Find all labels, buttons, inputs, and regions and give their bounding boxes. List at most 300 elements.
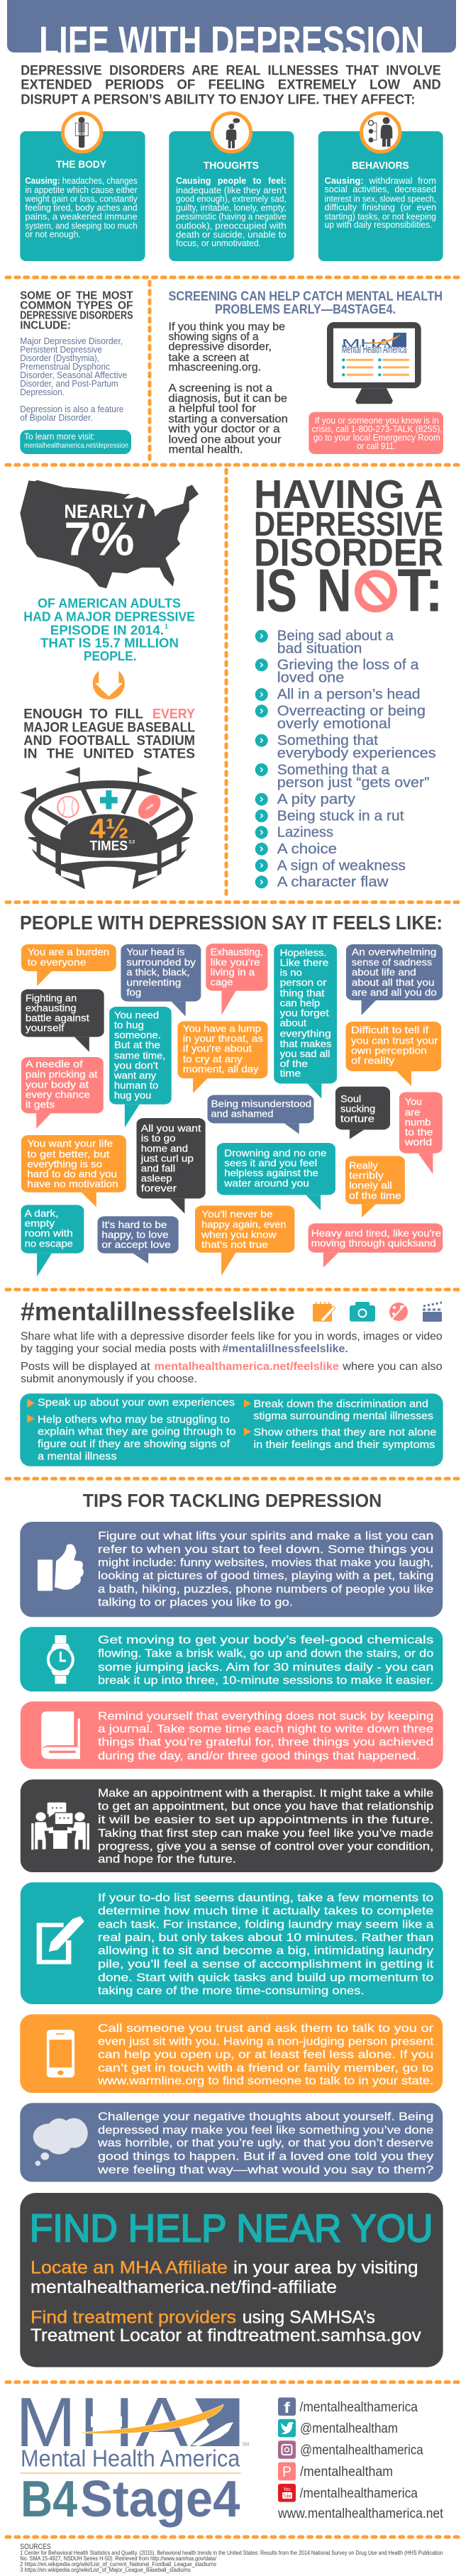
- callout: crisis line: crisis, call 1-800-273-TALK (8255),: [312, 424, 443, 434]
- heading: common types: DEPRESSIVE DISORDERS: [20, 309, 133, 321]
- icon: phone: [47, 2030, 74, 2077]
- panel: tip to-do list: [21, 1882, 443, 2004]
- list item: sad: Being sad about a: [277, 628, 394, 643]
- bubble: torture: torture: [340, 1114, 374, 1124]
- bubble: never be happy: [195, 1205, 294, 1276]
- panel: behaviors: social activities, decreased: [325, 184, 436, 194]
- bubble: hug: you don't: [114, 1061, 159, 1071]
- panel: tip to-do list: each task. For instance, folding laundry may seem like a: [98, 1918, 433, 1930]
- bubble: trust perception: you can trust your: [351, 1036, 438, 1046]
- bubble: hard to be happy: It's hard to be: [101, 1220, 167, 1231]
- social: instagram: [278, 2440, 423, 2459]
- panel: tip therapist: to get an appointment, but once you have that relationship: [98, 1801, 433, 1813]
- icon: film clapper: [423, 1303, 442, 1322]
- bubble: fall asleep forever: forever: [141, 1183, 177, 1194]
- bubble: hug: hug you: [114, 1090, 151, 1101]
- bubble: lonely: [345, 1156, 405, 1217]
- panel: find help near you: [20, 2193, 443, 2367]
- bubble: fighting battle: Fighting an: [26, 993, 77, 1004]
- panel: screening: [167, 288, 443, 455]
- bullet: show others: [244, 1427, 436, 1451]
- bullet: break down discrimination: stigma surrounding mental illnesses: [254, 1410, 433, 1422]
- bubble: hopeless: thing that: [280, 988, 325, 999]
- heading: common types: INCLUDE:: [20, 319, 71, 331]
- bubble: quicksand: moving through quicksand: [311, 1239, 436, 1249]
- bubble: hopeless: you sad all: [280, 1049, 330, 1060]
- heading: common types: [20, 289, 133, 331]
- bubble: lump: You have a lump: [183, 1024, 261, 1034]
- bubble: fog: surrounded by: [126, 958, 196, 968]
- panel: tip get moving: some jumping jacks. Aim for 30 minutes daily - you can: [98, 1662, 433, 1674]
- panel: tip journal: [21, 1701, 443, 1769]
- panel: tip call someone: www.warmline.org to find someone to talk to in your state.: [97, 2075, 433, 2087]
- list item: choice: A choice: [277, 841, 337, 857]
- screening text: depressive disorder,: [169, 341, 272, 353]
- bubble: burden: You are a burden: [28, 947, 109, 958]
- bubble: hard to be happy: [98, 1216, 179, 1264]
- panel: tip challenge thoughts: depressed may make you feel like something you’ve done: [98, 2124, 433, 2136]
- panel: the body: THE BODY: [56, 159, 106, 171]
- panel: thoughts: good enough), extremely sad,: [176, 194, 287, 204]
- icon: x-ray body: [62, 114, 101, 152]
- bubble: hopeless: Like there: [280, 958, 329, 968]
- bubble: misunderstood: [208, 1095, 314, 1134]
- intro statement: EXTENDED PERIODS OF FEELING EXTREMELY LOW AND: [21, 77, 441, 93]
- screening text: loved one about your: [169, 433, 282, 446]
- bubble: fog: [121, 944, 201, 1017]
- list item: grieving: loved one: [277, 670, 344, 686]
- panel: tip get moving: break it up into three, 10-minute sessions to make it easier.: [98, 1674, 433, 1686]
- list item: weakness: A sign of weakness: [277, 858, 406, 873]
- callout: crisis line: [309, 412, 443, 454]
- bubble: drowning: Drowning and no one: [224, 1149, 327, 1159]
- screening text: take a screen at: [169, 352, 250, 364]
- chart: US map nearly 7 percent: [20, 480, 199, 588]
- social: twitter: [278, 2419, 398, 2437]
- list item: sad: bad situation: [277, 641, 362, 656]
- list item: choice: [255, 841, 337, 857]
- intro statement: DISRUPT A PERSON’S ABILITY TO ENJOY LIFE. THEY AFFECT:: [21, 92, 415, 108]
- panel: thoughts: THOUGHTS: [204, 160, 259, 172]
- title banner: [7, 0, 456, 65]
- statistic text: EPISODE IN 2014.: [50, 622, 164, 637]
- screening text: mental health.: [169, 443, 243, 455]
- disorder list text: Disorder (Dysthymia),: [20, 353, 99, 363]
- social: pinterest: [278, 2462, 393, 2480]
- panel: tip to-do list: real pain, but only takes about 10 minutes. Rather than: [98, 1932, 433, 1944]
- social: youtube: You: [284, 2487, 291, 2492]
- bubble: misunderstood: and ashamed: [211, 1109, 273, 1120]
- panel: tip call someone: Call someone you trust and ask them to talk to you or: [98, 2023, 434, 2035]
- icon: thumbs up: [38, 1544, 84, 1591]
- bubble: no motivation: You want your life: [27, 1139, 113, 1149]
- bubble: no motivation: to get better, but: [27, 1149, 110, 1160]
- icon: pencil and checkbox: [39, 1916, 84, 1962]
- panel: the body: [20, 114, 145, 261]
- panel: tip call someone: [20, 2014, 443, 2093]
- icon: thought cloud: [33, 2118, 88, 2166]
- website: www.mentalhealthamerica.net: [277, 2506, 444, 2521]
- sources: SOURCES: [20, 2543, 51, 2551]
- panel: thoughts: guilty, irritable, lonely, empty,: [176, 203, 287, 213]
- bubble: no motivation: have no motivation: [27, 1179, 118, 1190]
- disorder list text: of Bipolar Disorder.: [20, 413, 93, 423]
- bubble: drowning: helpless against the: [224, 1168, 318, 1179]
- panel: find help near you: using SAMHSA’s: [243, 2307, 375, 2327]
- chart: US map nearly 7 percent: NEARLY: [64, 501, 134, 522]
- list: what depression is not: [255, 628, 436, 890]
- icon: down arrow: [93, 665, 125, 700]
- heading: hashtag: #mentalillnessfeelslike: [21, 1297, 295, 1326]
- bubble: needle: it gets: [26, 1100, 55, 1110]
- panel: thoughts: Causing people to feel:: [176, 176, 287, 186]
- bubble: never be happy: You'll never be: [201, 1210, 273, 1220]
- icon: computer monitor with MHA logo: [327, 322, 421, 404]
- panel: thoughts: death or suicide, unable to: [176, 230, 287, 240]
- screening text: [167, 321, 288, 455]
- text block: share your experience: Share what life with a depressive disorder feels like for you in words, images or video: [21, 1330, 443, 1342]
- logo: Mental Health America B4Stage4: Mental Health America: [21, 2445, 240, 2472]
- panel: behaviors: interest in sex, slowed speech,: [325, 194, 436, 204]
- stadium comparison text: ENOUGH TO FILL: [23, 707, 143, 722]
- bubble: fall asleep forever: asleep: [141, 1173, 172, 1184]
- panel: find help near you: Treatment Locator at findtreatment.samhsa.gov: [30, 2326, 421, 2345]
- logo: Mental Health America B4Stage4: H: [79, 2383, 134, 2461]
- bubble: dark room: no escape: [25, 1239, 73, 1249]
- learn more button: To learn more visit:: [24, 431, 95, 441]
- disorder list text: Premenstrual Dysphoric: [20, 362, 110, 372]
- panel: tip get moving: flowing. Take a brisk walk, go up and down the stairs, or do: [98, 1648, 433, 1660]
- bubble: dark room: empty: [25, 1219, 55, 1229]
- panel: common types of depressive disorders: [20, 289, 133, 454]
- text block: share your experience: by tagging your social media posts with: [21, 1343, 220, 1355]
- stadium comparison text: AND FOOTBALL STADIUM: [23, 733, 195, 748]
- panel: behaviors: starting) tasks, or not keeping: [325, 211, 436, 221]
- icon: person with behaviors: [362, 114, 400, 152]
- list item: overreacting: overly emotional: [277, 717, 391, 732]
- panel: hashtag benefits: [20, 1393, 443, 1466]
- panel: tip call someone: can help you open up, or at least feel less alone. If you: [98, 2049, 433, 2061]
- bubble: cage: cage: [211, 978, 233, 988]
- panel: the body: or not enough.: [25, 229, 81, 239]
- bubble: fall asleep forever: is to go: [141, 1134, 176, 1144]
- list item: rut: Being stuck in a rut: [277, 808, 404, 824]
- bubble: needle: pain pricking at: [26, 1070, 98, 1080]
- bubble: fighting battle: exhausting: [26, 1003, 77, 1014]
- sources: [20, 2543, 443, 2573]
- bubble: drowning: water around you: [223, 1178, 309, 1189]
- logo: Mental Health America B4Stage4: M: [16, 2383, 76, 2461]
- disorder list text: Major Depressive Disorder,: [20, 336, 123, 346]
- chart: US map nearly 7 percent: 7%: [64, 513, 135, 566]
- bubble: hug: But at the: [114, 1040, 160, 1051]
- callout: crisis line: or call 911.: [357, 441, 396, 451]
- social: pinterest: /mentalhealtham: [300, 2465, 393, 2480]
- bubble: hug: [109, 1007, 172, 1127]
- bubble: cage: like you're: [211, 958, 260, 968]
- list item: gets over: person just “gets over”: [277, 775, 429, 790]
- bubble: needle: [21, 1057, 104, 1129]
- sources: 2 https://en.wikipedia.org/wiki/List_of_current_National_Football_League_stadiums: [20, 2561, 216, 2567]
- stadium comparison text: MAJOR LEAGUE BASEBALL: [23, 719, 195, 735]
- panel: tip lifts your spirits: might include: funny websites, movies that make you laugh,: [98, 1557, 433, 1569]
- statistic text: THAT IS 15.7 MILLION: [40, 636, 179, 651]
- bubble: trust perception: Difficult to tell if: [351, 1025, 429, 1036]
- panel: the body: Causing: headaches, changes: [25, 176, 138, 186]
- bubble: fall asleep forever: and fall: [141, 1163, 175, 1174]
- panel: tip lifts your spirits: refer to when you start to feel down. Some things you: [98, 1544, 433, 1556]
- bubble: overwhelming sadness: An overwhelming: [352, 947, 436, 958]
- bubble: trust perception: [346, 1022, 441, 1086]
- icon: camera: [350, 1302, 375, 1322]
- bullet: help others: Help others who may be struggling to: [38, 1414, 230, 1426]
- heading: common types: COMMON TYPES OF: [20, 299, 133, 311]
- disorder list text: Persistent Depressive: [20, 345, 102, 355]
- bubble: lump: if you're about: [183, 1044, 252, 1054]
- bubble: lonely: of the time: [349, 1191, 401, 1202]
- panel: tip to-do list: done. Start with quick tasks and build up momentum to: [98, 1972, 433, 1984]
- bubble: hopeless: can help: [280, 998, 320, 1009]
- panel: find help near you: Find treatment providers: [30, 2307, 236, 2327]
- callout: crisis line: go to your local Emergency Room: [313, 433, 440, 443]
- bubble: torture: [335, 1087, 390, 1139]
- statistic text: [23, 596, 195, 663]
- social: youtube: Tube: [283, 2494, 291, 2499]
- bubble: no motivation: everything is so: [27, 1159, 102, 1170]
- heading: having a depressive disorder is not: DISORDER: [254, 531, 443, 575]
- bubble: cage: [206, 944, 268, 1015]
- bubble: cage: Exhausting,: [211, 947, 263, 958]
- bubble: overwhelming sadness: about all that you: [352, 978, 435, 988]
- social: twitter: @mentalhealtham: [300, 2421, 398, 2436]
- panel: tip get moving: [20, 1627, 443, 1691]
- disorder list text: Disorder, Seasonal Affective: [20, 370, 127, 380]
- statistic text: HAD A MAJOR DEPRESSIVE: [23, 609, 195, 624]
- logo: Mental Health America B4Stage4: A: [135, 2383, 189, 2461]
- bubble: never be happy: when you know: [201, 1230, 277, 1241]
- panel: the body: system, and sleeping too much: [25, 221, 138, 231]
- disorder list text: Disorder, and Post-Partum: [20, 379, 118, 389]
- screening text: A screening is not a: [169, 382, 272, 394]
- bubble: hard to be happy: happy, to love: [101, 1230, 169, 1241]
- icon: stadium 4 and a half times: [20, 768, 198, 889]
- bubble: lump: to cry at any: [183, 1054, 243, 1065]
- screening text: mhascreening.org.: [169, 362, 261, 374]
- bullet: help others: [27, 1414, 236, 1463]
- bubble: hug: want any: [113, 1071, 156, 1081]
- text block: share your experience: mentalhealthamerica.net/feelslike: [155, 1361, 339, 1373]
- bubble: hard to be happy: or accept love: [101, 1240, 171, 1251]
- list item: everybody: everybody experiences: [277, 746, 436, 761]
- bubble: torture: Soul: [340, 1094, 361, 1105]
- panel: behaviors: [318, 114, 443, 261]
- bubble: needle: every chance: [26, 1090, 90, 1100]
- social: instagram: @mentalhealthamerica: [300, 2443, 423, 2458]
- bubble: fall asleep forever: just curl up: [140, 1154, 194, 1164]
- list item: grieving: [255, 658, 419, 686]
- list item: pity party: A pity party: [277, 792, 355, 807]
- bubble: never be happy: that's not true: [201, 1240, 268, 1251]
- panel: the body: feeling tired, body aches and: [25, 203, 138, 213]
- bubble: lonely: terribly: [349, 1171, 384, 1181]
- bubble: hug: human to: [114, 1080, 159, 1091]
- panel: tip journal: a journal. Take some time each night to write down three: [98, 1723, 433, 1735]
- bubble: hopeless: person or: [280, 978, 327, 988]
- panel: tip get moving: Get moving to get your body’s feel-good chemicals: [98, 1635, 433, 1647]
- panel: tip challenge thoughts: good things to happen. But if a loved one told you they: [98, 2150, 433, 2162]
- bubble: trust perception: of reality: [351, 1056, 394, 1066]
- disorder list text: [20, 336, 127, 423]
- panel: tip lifts your spirits: a bath, hiking, puzzles, phone numbers of people you like: [98, 1583, 433, 1596]
- bubble: burden: to everyone: [28, 958, 87, 968]
- panel: tip therapist: [21, 1779, 443, 1872]
- bubble: lump: [177, 1021, 268, 1093]
- bubble: overwhelming sadness: sense of sadness: [352, 958, 432, 968]
- heading: having a depressive disorder is not: HAVING A: [254, 472, 443, 517]
- bubble: overwhelming sadness: are and all you do: [352, 988, 437, 998]
- bubble: hopeless: is no: [280, 968, 302, 978]
- bubble: no motivation: [21, 1135, 126, 1207]
- logo: Mental Health America B4Stage4: B4: [21, 2471, 77, 2528]
- list item: gets over: Something that a: [277, 762, 390, 778]
- bubble: numb: numb: [405, 1117, 431, 1128]
- bubble: numb: are: [405, 1107, 421, 1118]
- bullet: help others: a mental illness: [38, 1451, 117, 1463]
- bubble: fog: fog: [126, 988, 141, 998]
- panel: tip therapist: Make an appointment with a therapist. It might take a while: [98, 1788, 433, 1800]
- panel: social media: [277, 2397, 444, 2521]
- stadium comparison text: IN THE UNITED STATES: [23, 746, 195, 761]
- bullet: break down discrimination: Break down the discrimination and: [254, 1398, 428, 1410]
- bubble: hug: You need: [114, 1010, 159, 1021]
- sources: 3 https://en.wikipedia.org/wiki/List_of_Major_League_Baseball_stadiums: [20, 2567, 191, 2573]
- icon: stadium 4 and a half times: 2,3: [129, 840, 135, 844]
- panel: thoughts: pessimistic (having a negative: [176, 211, 287, 221]
- panel: tip challenge thoughts: were feeling that way—what would you say to them?: [97, 2164, 433, 2176]
- bubble: hug: same time,: [114, 1051, 165, 1061]
- bubble: fall asleep forever: [137, 1118, 206, 1214]
- bubble: hug: someone.: [114, 1030, 161, 1041]
- panel: speech bubbles: [21, 944, 443, 1276]
- bubble: hopeless: about: [280, 1018, 307, 1029]
- text block: share your experience: where you can also: [342, 1361, 443, 1373]
- text block: share your experience: Posts will be displayed at: [21, 1361, 150, 1373]
- bubble: hopeless: that makes: [280, 1039, 332, 1050]
- intro statement: [21, 63, 441, 108]
- callout: crisis line: If you or someone you know is in: [315, 416, 439, 426]
- panel: behaviors: difficulty finishing (or even: [325, 202, 436, 212]
- stadium comparison text: EVERY: [152, 707, 195, 722]
- bubble: quicksand: Heavy and tired, like you're: [311, 1229, 441, 1239]
- icon: stadium 4 and a half times: 4½: [90, 814, 129, 845]
- panel: tip to-do list: taking care of the more time-consuming ones.: [98, 1985, 365, 1997]
- bubble: dark room: [21, 1205, 84, 1276]
- bubble: never be happy: happy again, even: [201, 1220, 286, 1230]
- screening text: starting a conversation: [169, 414, 288, 426]
- text block: share your experience: #mentalillnessfeelslike.: [222, 1343, 348, 1355]
- panel: find help near you: FIND HELP NEAR YOU: [30, 2206, 433, 2250]
- panel: find help near you: Locate an MHA Affiliate: [30, 2258, 228, 2278]
- icon: therapy meeting: [31, 1803, 89, 1850]
- text block: share your experience: [21, 1330, 443, 1385]
- bubble: numb: to the: [405, 1127, 433, 1138]
- list item: overreacting: [255, 704, 426, 732]
- list item: character flaw: A character flaw: [277, 875, 389, 890]
- heading: screening: [169, 288, 443, 316]
- heading: having a depressive disorder is not: IS: [254, 558, 297, 625]
- bullet: help others: figure out if they are showing signs of: [38, 1438, 230, 1450]
- panel: tip journal: during the day, and/or three good things that happened.: [98, 1750, 420, 1762]
- icon: person thinking: [212, 114, 250, 152]
- bubble: fighting battle: battle against: [26, 1013, 89, 1024]
- panel: find help near you: in your area by visiting: [233, 2258, 418, 2278]
- screening text: If you think you may be: [169, 321, 285, 333]
- heading: tips: TIPS FOR TACKLING DEPRESSION: [83, 1490, 382, 1511]
- bubble: numb: You: [405, 1097, 422, 1107]
- panel: the body: pains, a weakened immune: [25, 211, 138, 221]
- bubble: lump: in your throat, as: [183, 1034, 263, 1044]
- icon: computer monitor with MHA logo: Mental Health America: [342, 344, 407, 356]
- panel: tip challenge thoughts: [20, 2103, 443, 2182]
- social: facebook: [278, 2397, 418, 2416]
- logo: Mental Health America B4Stage4: Stage4: [80, 2471, 240, 2528]
- bullet: show others: Show others that they are not alone: [254, 1427, 436, 1439]
- panel: find help near you: mentalhealthamerica.net/find-affiliate: [30, 2277, 337, 2297]
- screening text: a helpful tool for: [169, 403, 256, 415]
- icon: computer monitor with MHA logo: MHA: [342, 338, 392, 350]
- learn more button: mentalhealthamerica.net/depression: [24, 441, 128, 450]
- bubble: lump: moment, all day: [183, 1064, 259, 1075]
- panel: tip to-do list: determine how much time it actually takes to complete: [98, 1905, 433, 1917]
- disorder list text: Depression.: [20, 387, 65, 397]
- bullet: speak up: Speak up about your own experiences: [38, 1397, 235, 1409]
- panel: tip lifts your spirits: looking at pictures of good times, playing with a pet, taking: [98, 1570, 433, 1582]
- bubble: hopeless: everything: [280, 1029, 331, 1039]
- panel: the body: in appetite which cause either: [25, 185, 138, 195]
- panel: tip challenge thoughts: Challenge your negative thoughts about yourself. Being: [98, 2111, 433, 2123]
- panel: tip to-do list: If your to-do list seems daunting, take a few moments to: [98, 1892, 433, 1904]
- bubble: hopeless: [274, 944, 337, 1098]
- bubble: fighting battle: [21, 989, 104, 1052]
- list item: overreacting: Overreacting or being: [277, 704, 426, 719]
- icon: palette: [389, 1303, 408, 1321]
- icon: notepad: [313, 1302, 335, 1322]
- panel: the body: weight gain or loss, constantly: [24, 194, 138, 204]
- logo: Mental Health America B4Stage4: [16, 2383, 249, 2528]
- icon: no symbol: [358, 573, 394, 609]
- bubble: misunderstood: Being misunderstood: [211, 1099, 311, 1110]
- panel: tip therapist: and hope for the future.: [98, 1854, 236, 1866]
- bubble: drowning: sees it and you feel: [224, 1159, 317, 1169]
- bubble: needle: your body at: [26, 1080, 89, 1090]
- bubble: fog: a thick, black,: [126, 968, 190, 978]
- social: youtube: /mentalhealthamerica: [299, 2486, 418, 2502]
- statistic text: PEOPLE.: [84, 648, 136, 663]
- panel: tip journal: things that you’re grateful for, three things you achieved: [98, 1737, 433, 1749]
- social: facebook: /mentalhealthamerica: [299, 2400, 418, 2415]
- bubble: overwhelming sadness: [346, 944, 443, 1015]
- statistic text: OF AMERICAN ADULTS: [38, 596, 181, 611]
- icon: watch: [47, 1635, 74, 1684]
- sources: No. SMA 15-4927, NSDUH Series H-50). Retrieved from http://www.samhsa.gov/data/: [20, 2555, 217, 2562]
- panel: tip to-do list: pile, you’ll feel a sense of accomplishment in getting it: [98, 1958, 434, 1970]
- bubble: burden: [21, 944, 116, 986]
- bubble: numb: [399, 1092, 443, 1174]
- panel: behaviors: up with daily responsibilities.: [325, 220, 433, 230]
- panel: tip to-do list: allowing it to sit and become a big, intimidating laundry: [98, 1945, 433, 1957]
- panel: tip lifts your spirits: [20, 1522, 443, 1617]
- bubble: hopeless: time: [280, 1068, 301, 1079]
